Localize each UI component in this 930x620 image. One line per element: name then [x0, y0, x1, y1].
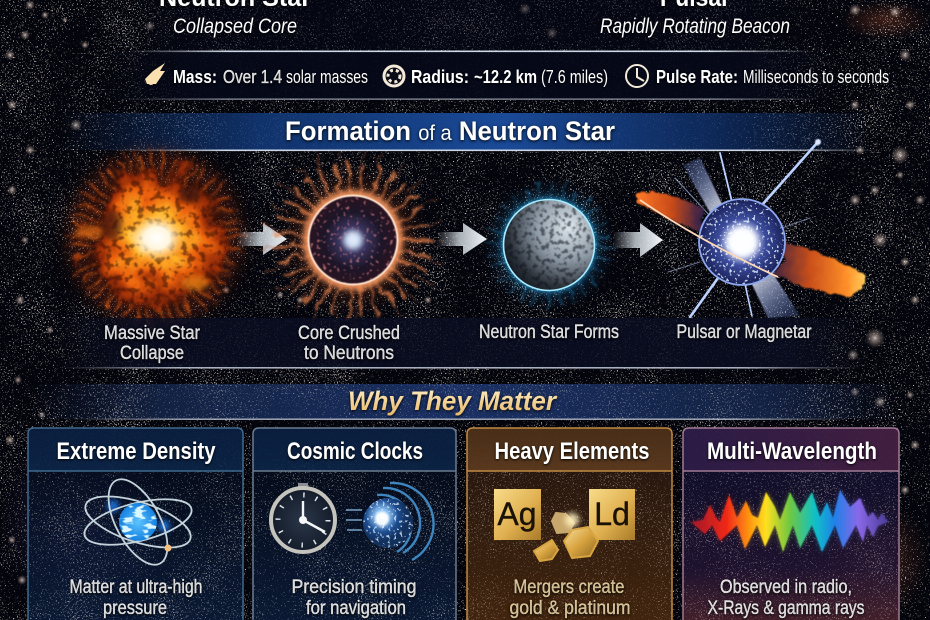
text	[70, 577, 202, 619]
panel: extreme density	[28, 428, 243, 620]
subheading: Collapsed Core: Collapsed Core	[173, 15, 297, 38]
icon: gold nuggets	[534, 513, 598, 561]
caption band	[50, 318, 870, 369]
caption: neutron star forms: Neutron Star Forms	[479, 322, 619, 343]
section banner: formation	[60, 113, 880, 151]
heading: Multi-Wavelength	[707, 438, 877, 465]
accretion disk left lobe	[636, 192, 702, 232]
stat: radius: ~12.2 km	[474, 67, 537, 87]
front ring	[640, 200, 778, 277]
icon: silver tile Ag	[494, 489, 541, 540]
stat: radius: Radius:	[411, 67, 469, 87]
accretion disk right lobe	[772, 242, 866, 296]
stat: pulse rate	[656, 67, 889, 87]
caption: pulsar or magnetar: Pulsar or Magnetar	[676, 322, 812, 343]
icon: tile Ld: Ld	[594, 496, 630, 532]
icon: clock	[271, 483, 335, 552]
heading: Cosmic Clocks	[287, 438, 423, 465]
caption: massive star collapse	[104, 323, 201, 364]
stat: mass: Over 1.4	[223, 67, 282, 87]
text: Observed in radio,	[720, 577, 852, 598]
text	[510, 577, 630, 619]
icon: radius ring	[384, 66, 404, 86]
caption: core crushed to neutrons	[298, 323, 400, 364]
stat: radius	[411, 67, 608, 87]
text: Matter at ultra-high	[70, 577, 202, 598]
heading: Why They Matter: Why They Matter	[348, 386, 557, 416]
text: pressure	[103, 598, 167, 619]
stats bar	[100, 50, 889, 100]
stat: mass	[173, 67, 368, 87]
stage 4: pulsar or magnetar	[636, 139, 866, 318]
icon: clock	[626, 65, 648, 87]
header: neutron star and pulsar titles	[110, 0, 820, 50]
icon: silver tile Ag: Ag	[497, 496, 537, 532]
caption: massive star collapse: Massive Star	[104, 323, 201, 344]
stat: radius: (7.6 miles)	[541, 67, 608, 87]
stage 1: massive star collapse explosion	[67, 150, 243, 326]
stat: pulse rate: Milliseconds to seconds	[743, 67, 889, 87]
caption: massive star collapse: Collapse	[120, 343, 184, 364]
text: Mergers create	[514, 577, 624, 598]
caption: core crushed to neutrons: to Neutrons	[304, 343, 394, 364]
stat: mass: solar masses	[286, 67, 368, 87]
text	[708, 577, 864, 619]
panel: heavy elements	[467, 428, 672, 620]
icon: mass comet	[145, 63, 165, 85]
arrow: collapse to core	[237, 223, 287, 255]
heading: Extreme Density	[56, 438, 216, 465]
icon: pulsar with waves	[346, 483, 434, 560]
text	[292, 577, 416, 619]
pulsar jets	[668, 143, 817, 317]
panel: cosmic clocks	[253, 428, 456, 620]
chart: rainbow waveform	[691, 490, 888, 552]
text: gold & platinum	[510, 598, 630, 619]
pulsar sphere	[699, 199, 785, 285]
subheading: Rapidly Rotating Beacon: Rapidly Rotating Beacon	[600, 15, 790, 38]
section banner: why they matter	[30, 384, 900, 420]
stage 2: core crushed to neutrons	[273, 160, 433, 320]
arrow: neutron star to pulsar	[613, 223, 663, 257]
stat: mass: Mass:	[173, 67, 217, 87]
icon: atom	[84, 478, 192, 566]
arrow: core to neutron star	[437, 223, 487, 255]
heading: Heavy Elements	[494, 438, 650, 465]
panel: multi-wavelength	[683, 428, 899, 620]
text: X-Rays & gamma rays	[708, 598, 864, 619]
text: for navigation	[306, 598, 406, 619]
text: Precision timing	[292, 577, 416, 598]
heading: Formation of a Neutron Star: Formation of a Neutron Star	[285, 116, 615, 146]
caption: core crushed to neutrons: Core Crushed	[298, 323, 400, 344]
stat: pulse rate: Pulse Rate:	[656, 67, 738, 87]
stage 3: neutron star forms	[481, 177, 617, 313]
icon: tile Ld	[589, 489, 635, 540]
